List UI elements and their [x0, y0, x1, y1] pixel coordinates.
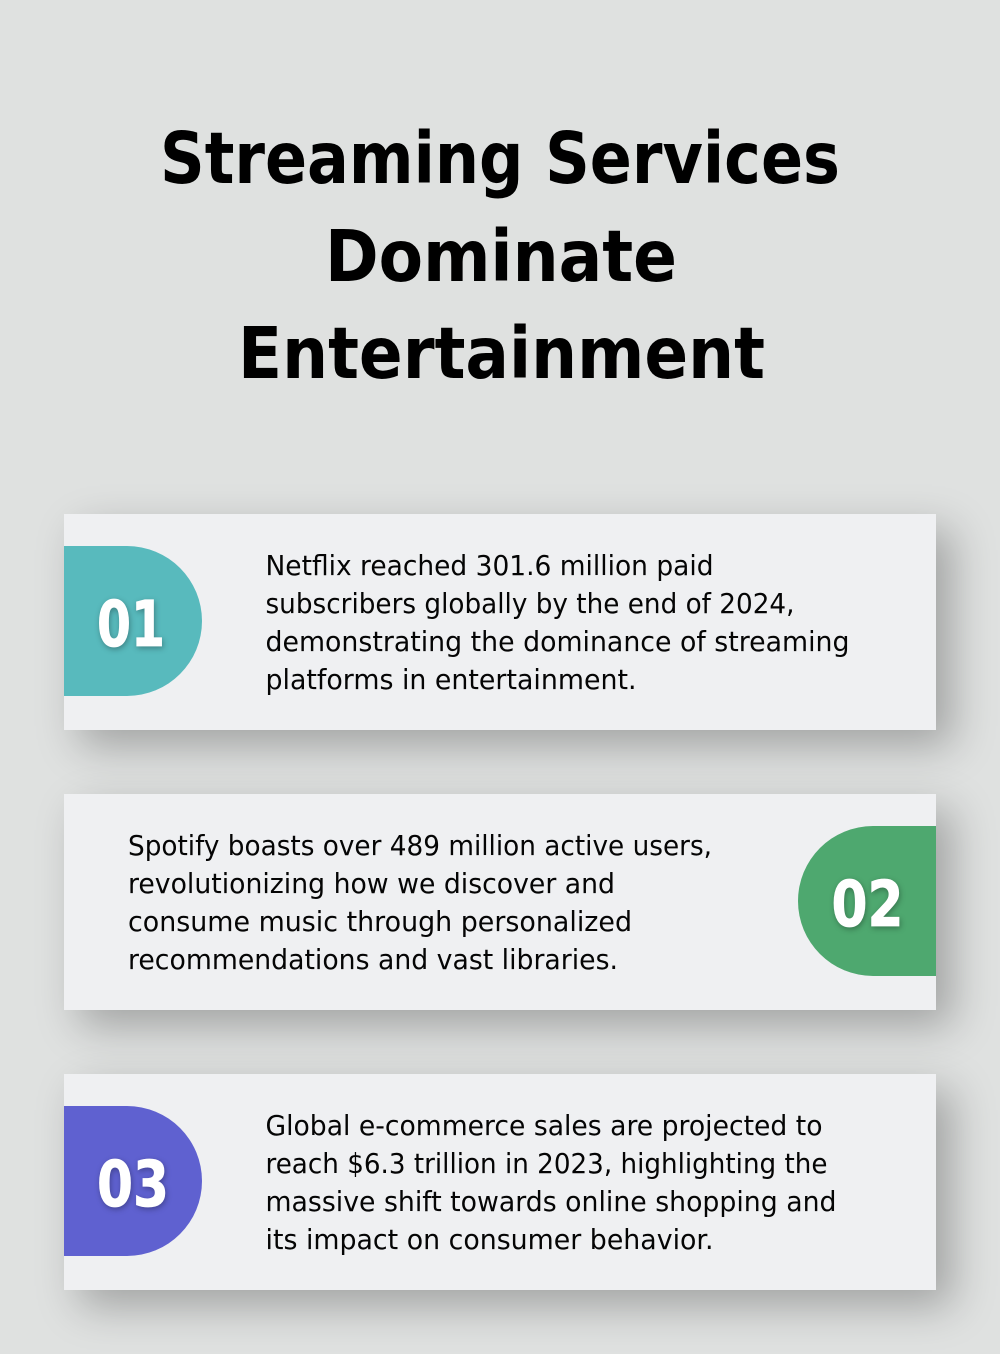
panel: Spotify card — [64, 794, 936, 1010]
number badge 02 — [798, 826, 936, 976]
number badge 03: 03 — [97, 1148, 169, 1221]
number badge 03 — [64, 1106, 202, 1256]
number badge 01: 01 — [97, 588, 165, 661]
text: e-commerce statistic: massive shift towards online shopping and — [266, 1185, 836, 1218]
text: Netflix statistic: demonstrating the dominance of streaming — [266, 625, 850, 658]
text: Spotify statistic: recommendations and vast libraries. — [128, 943, 618, 976]
text: Netflix statistic: subscribers globally by the end of 2024, — [266, 587, 794, 620]
text: e-commerce statistic: reach $6.3 trillion in 2023, highlighting the — [266, 1147, 828, 1180]
text: Netflix statistic — [266, 549, 850, 696]
text: Spotify statistic: Spotify boasts over 489 million active users, — [128, 829, 712, 862]
title: Entertainment — [238, 312, 765, 395]
text: e-commerce statistic — [266, 1109, 836, 1256]
title: Streaming Services — [160, 117, 840, 200]
text: e-commerce statistic: its impact on consumer behavior. — [266, 1223, 714, 1256]
title — [160, 117, 840, 395]
number badge 01 — [64, 546, 202, 696]
title: Dominate — [325, 215, 677, 298]
text: Netflix statistic: Netflix reached 301.6 million paid — [266, 549, 714, 582]
panel: e-commerce card — [64, 1074, 936, 1290]
text: Spotify statistic: consume music through personalized — [128, 905, 632, 938]
text: Netflix statistic: platforms in entertainment. — [266, 663, 636, 696]
text: Spotify statistic — [128, 829, 712, 976]
number badge 02: 02 — [832, 868, 904, 941]
text: e-commerce statistic: Global e-commerce sales are projected to — [266, 1109, 822, 1142]
panel: Netflix card — [64, 514, 936, 730]
text: Spotify statistic: revolutionizing how we discover and — [128, 867, 615, 900]
